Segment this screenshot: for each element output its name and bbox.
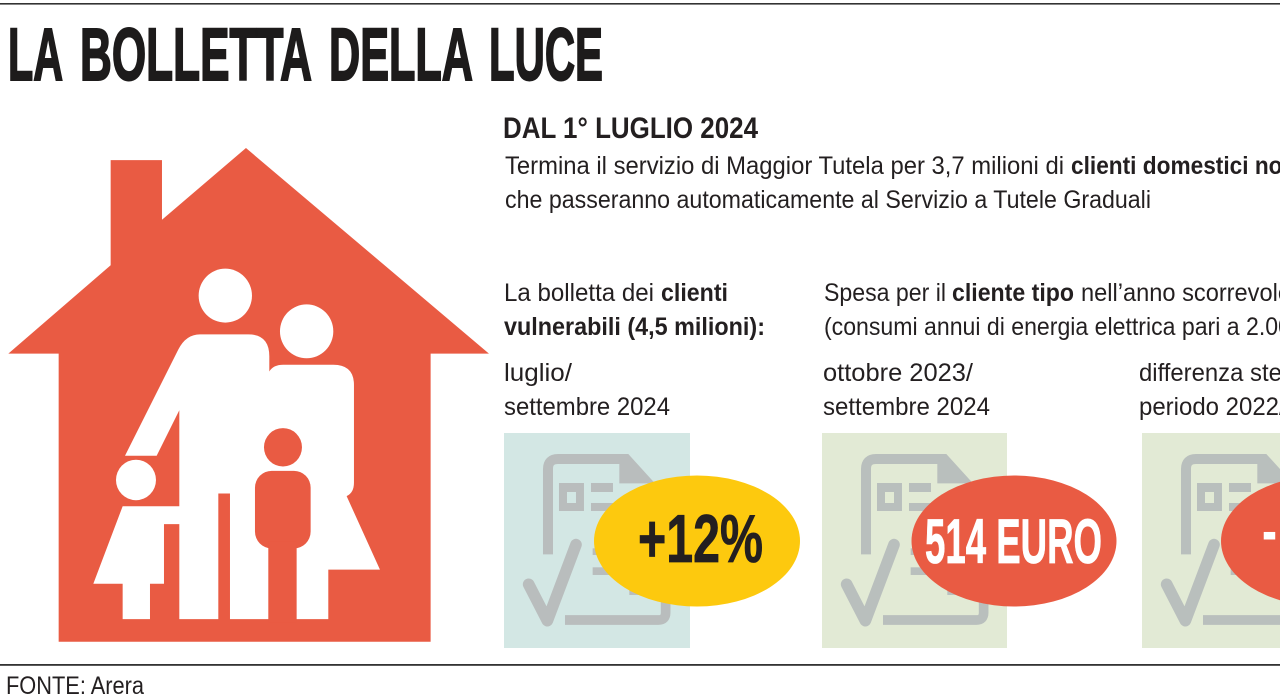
period label 1: luglio/ <box>504 359 572 387</box>
source note: FONTE: Arera <box>6 672 144 700</box>
icon: bill with check mark <box>1167 454 1280 621</box>
house silhouette <box>8 148 489 642</box>
callout: difference value <box>1221 476 1280 606</box>
text block: vulnerable customers: vulnerabili (4,5 milioni): <box>504 313 765 341</box>
callout: 514 euro <box>912 476 1116 606</box>
text block: vulnerable customers: La bolletta dei <box>504 279 654 307</box>
family figures <box>93 269 380 619</box>
callout: +12%: +12% <box>638 501 763 577</box>
title: LA <box>8 13 63 96</box>
title: DELLA <box>329 13 473 96</box>
heading: date: DAL 1° LUGLIO 2024 <box>503 112 758 145</box>
icon: bill with check mark <box>529 454 666 621</box>
child figure <box>255 428 311 623</box>
text block: vulnerable customers <box>504 279 765 341</box>
callout: 514 euro: 514 EURO <box>925 507 1102 577</box>
period label 2: ottobre 2023/ <box>823 359 973 387</box>
icon: bill with check mark <box>847 454 984 621</box>
period label 1: settembre 2024 <box>504 393 670 421</box>
text block: intro: che passeranno automaticamente al Servizio a Tutele Graduali <box>505 186 1151 214</box>
text block: intro <box>505 152 1280 214</box>
panel: difference from previous period <box>1142 433 1280 648</box>
icon: house with family <box>8 148 489 642</box>
title: LUCE <box>489 13 603 96</box>
period label 1 <box>504 359 670 421</box>
period label 2: settembre 2024 <box>823 393 990 421</box>
period label 2 <box>823 359 990 421</box>
text block: intro: Termina il servizio di Maggior Tutela per 3,7 milioni di <box>505 152 1064 180</box>
title: BOLLETTA <box>80 13 312 96</box>
panel: vulnerable customers bill <box>504 433 800 648</box>
period label 3 <box>1139 359 1280 421</box>
callout: +12% <box>594 476 800 606</box>
text block: typical customer: Spesa per il <box>824 279 946 307</box>
title <box>8 13 603 96</box>
panel: typical customer spend <box>822 433 1116 648</box>
text block: typical customer <box>824 279 1280 341</box>
text block: vulnerable customers: clienti <box>661 279 728 307</box>
text block: typical customer: cliente tipo <box>952 279 1074 307</box>
